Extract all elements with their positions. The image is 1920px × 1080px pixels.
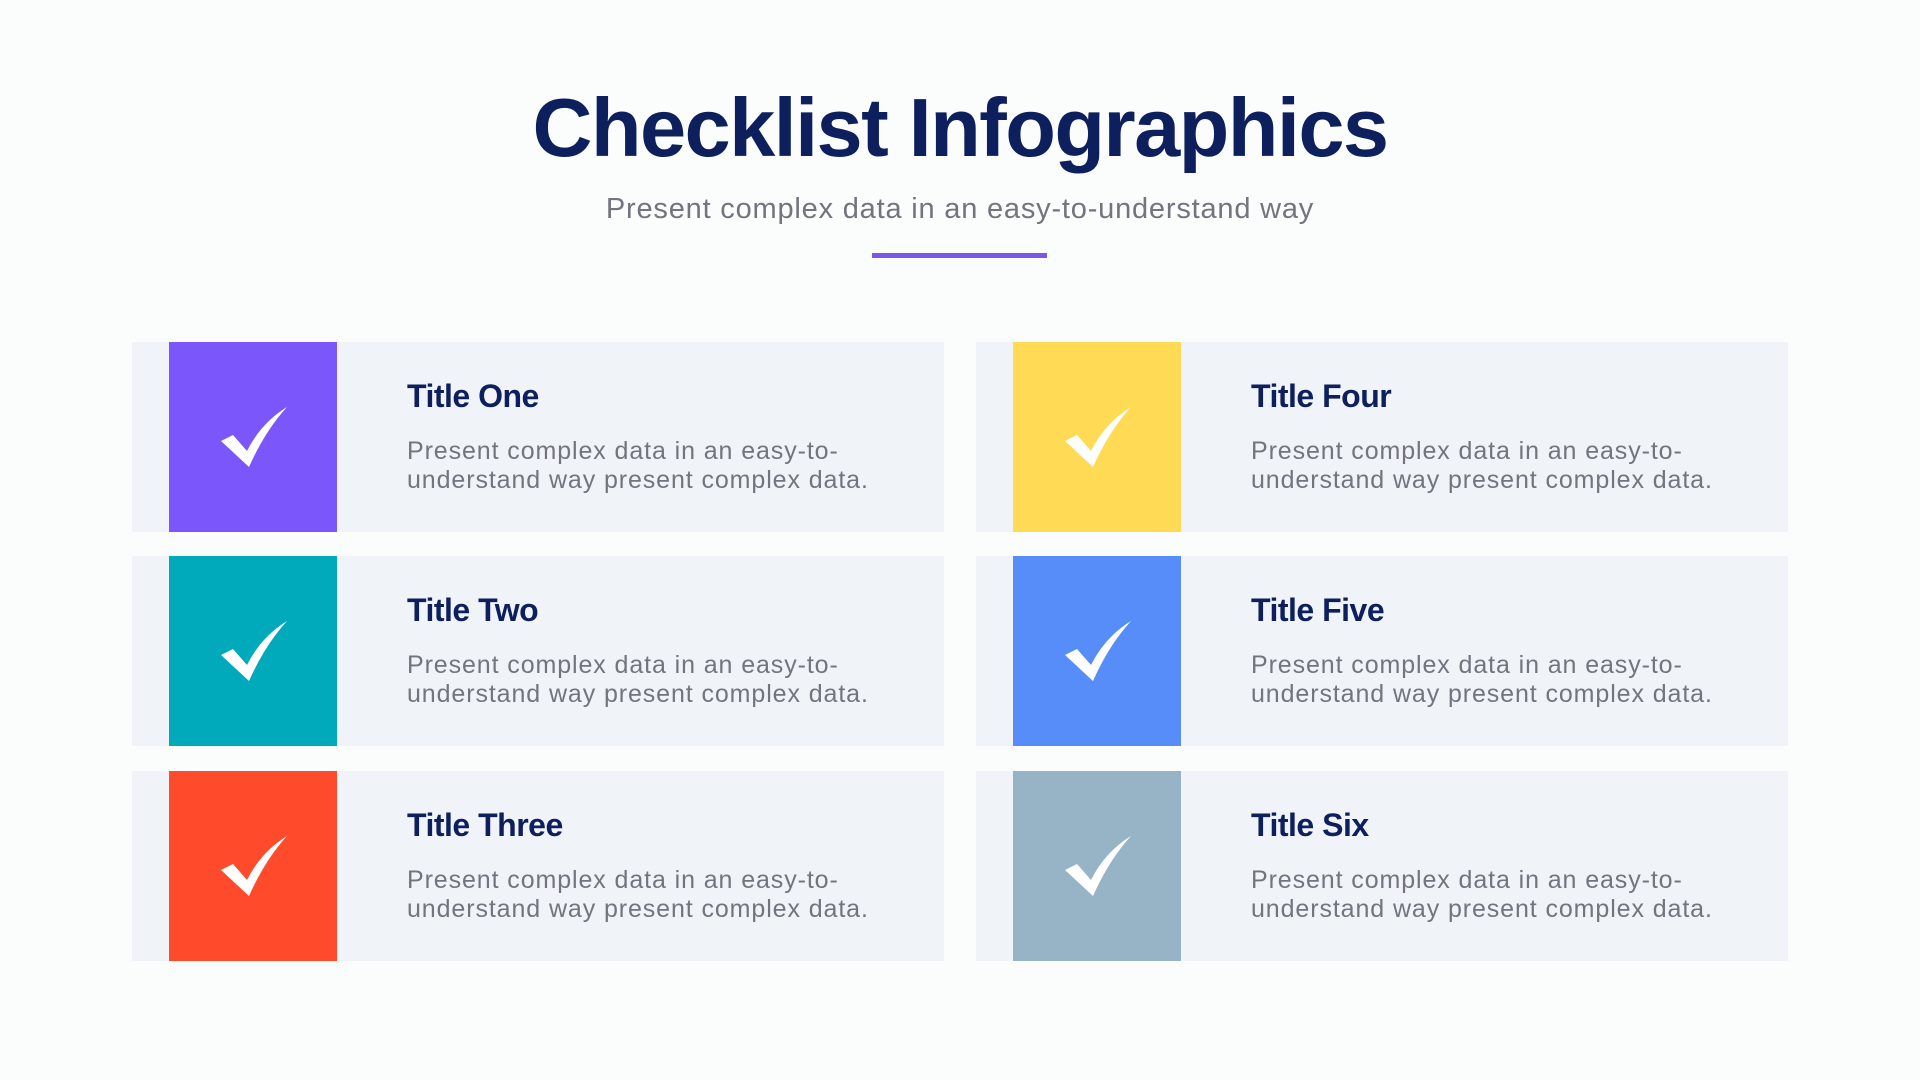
text: Present complex data in an easy-to- (407, 866, 839, 894)
panel: title six (976, 771, 1788, 961)
text: Present complex data in an easy-to- (1251, 866, 1683, 894)
heading: Title Five (1251, 592, 1384, 628)
text: understand way present complex data. (407, 680, 869, 708)
text: understand way present complex data. (407, 895, 869, 923)
icon: check blue (1013, 556, 1181, 746)
panel: title five (976, 556, 1788, 746)
icon: check red (169, 771, 337, 961)
subtitle: Present complex data in an easy-to-understand way (606, 193, 1314, 225)
text: understand way present complex data. (1251, 466, 1713, 494)
icon: check grey (1013, 771, 1181, 961)
text: Present complex data in an easy-to- (1251, 437, 1683, 465)
panel: title three (132, 771, 944, 961)
panel: title two (132, 556, 944, 746)
text: understand way present complex data. (1251, 895, 1713, 923)
icon: check purple (169, 342, 337, 532)
text: Present complex data in an easy-to- (407, 651, 839, 679)
text (1251, 437, 1713, 494)
panel: title four (976, 342, 1788, 532)
heading: Title Six (1251, 807, 1369, 843)
heading: Title One (407, 378, 539, 414)
panel: title one (132, 342, 944, 532)
text: Present complex data in an easy-to- (407, 437, 839, 465)
text (1251, 651, 1713, 708)
text: Present complex data in an easy-to- (1251, 651, 1683, 679)
icon: check teal (169, 556, 337, 746)
title: Checklist Infographics (533, 81, 1387, 174)
text (407, 866, 869, 923)
icon: check yellow (1013, 342, 1181, 532)
underline accent (872, 253, 1047, 258)
text: understand way present complex data. (407, 466, 869, 494)
heading: Title Two (407, 592, 538, 628)
text (407, 651, 869, 708)
text (407, 437, 869, 494)
text (1251, 866, 1713, 923)
heading: Title Three (407, 807, 563, 843)
text: understand way present complex data. (1251, 680, 1713, 708)
heading: Title Four (1251, 378, 1391, 414)
